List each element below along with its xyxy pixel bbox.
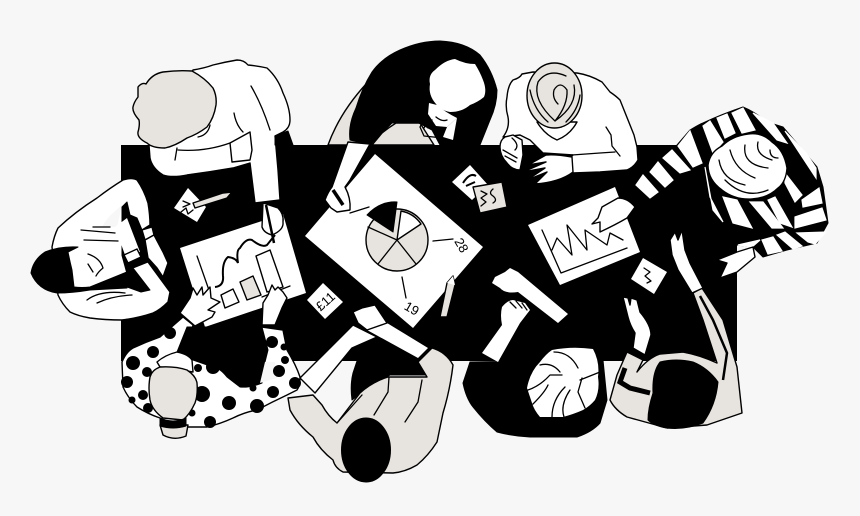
left arm <box>300 325 377 393</box>
grey bar <box>240 276 261 300</box>
person: top centre, black shirt <box>328 41 497 145</box>
left hand <box>180 287 220 326</box>
note: small right <box>631 258 667 294</box>
nose and eyes <box>88 254 103 276</box>
note <box>174 188 206 222</box>
background patch <box>260 362 277 383</box>
shirt <box>122 317 300 427</box>
note: lower left: £11 <box>313 289 338 314</box>
table <box>121 145 737 361</box>
hair <box>527 348 599 417</box>
black sweater base <box>677 107 828 257</box>
hair lines <box>528 352 600 417</box>
sleeve lines <box>81 227 132 303</box>
hand at chin <box>420 117 447 138</box>
face sliver <box>198 125 210 137</box>
face <box>67 247 126 287</box>
finger lines <box>510 301 527 310</box>
hand <box>353 305 387 330</box>
polka dots <box>121 314 301 428</box>
shoulder in black <box>275 131 293 145</box>
right hand <box>262 285 287 325</box>
white bar <box>221 289 239 308</box>
note: white scribble <box>452 165 488 200</box>
black hair <box>648 360 718 428</box>
pie base <box>366 209 428 271</box>
chair back and lap <box>328 83 434 145</box>
black hair <box>31 247 127 293</box>
hair curls <box>719 142 778 193</box>
pie dividers <box>368 227 416 264</box>
right chart sheet <box>528 187 640 285</box>
person: bottom right, grey jacket <box>610 230 742 428</box>
grey shirt <box>288 348 453 473</box>
sheet <box>305 154 483 328</box>
white sweater <box>503 72 638 173</box>
jacket stripes <box>700 296 727 380</box>
wavy trend line <box>215 235 275 287</box>
person: right, striped sweater <box>592 107 828 278</box>
black body <box>463 360 607 437</box>
cuff far arm <box>142 227 154 240</box>
collar bottom <box>160 425 188 438</box>
sweater crease <box>572 127 620 156</box>
black offset wedge <box>367 202 397 232</box>
label line 28 <box>433 239 453 241</box>
face <box>537 122 577 140</box>
hat <box>527 63 582 128</box>
note: lower left <box>307 283 343 319</box>
face <box>428 103 457 127</box>
tall bar <box>256 250 283 292</box>
pie chart sheet <box>305 154 483 328</box>
left raised hand <box>623 297 651 355</box>
grey hair <box>133 71 216 148</box>
person: top left, grey hair <box>133 60 293 203</box>
person: bottom, white curly hair <box>463 268 607 437</box>
label 28: 28 <box>451 235 472 255</box>
grey head <box>149 367 197 420</box>
far hand <box>145 235 168 277</box>
right arm <box>367 323 428 358</box>
base line <box>262 286 290 297</box>
black shirt <box>350 41 497 145</box>
right raised hand <box>670 230 703 293</box>
note with scribble and pencil <box>174 188 232 222</box>
black vest <box>351 360 427 400</box>
shirt folds <box>337 377 422 423</box>
label 19: 19 <box>402 298 422 319</box>
black head <box>342 418 390 482</box>
tablet and sleeve shadow <box>122 202 150 292</box>
light gap behind arm <box>102 205 122 227</box>
pencil <box>193 192 232 208</box>
zigzag line <box>552 225 623 255</box>
sheet <box>528 187 640 285</box>
left chart sheet <box>180 214 306 327</box>
near hand <box>115 218 140 255</box>
person: bottom centre, grey shirt <box>288 305 453 482</box>
pointer line to pen <box>350 207 369 213</box>
axis <box>197 256 210 293</box>
hand <box>230 132 252 162</box>
white hair <box>430 59 485 112</box>
label line 19 <box>402 277 406 298</box>
white shirt <box>149 60 290 203</box>
near cuff <box>124 249 141 263</box>
arm and hand with pen on pie sheet <box>325 142 370 212</box>
white slice <box>397 211 421 240</box>
axis <box>542 230 627 273</box>
person: left, black hair <box>31 178 170 320</box>
white curly hair <box>708 134 787 199</box>
white hair <box>157 352 193 372</box>
hand on table edge <box>717 247 755 278</box>
arm creases <box>175 86 270 160</box>
left hand <box>500 135 523 170</box>
person: bottom left, polka dot shirt <box>121 285 301 438</box>
person: top right, hat <box>500 63 638 184</box>
arm with hand <box>482 300 530 362</box>
white body <box>52 178 170 320</box>
scribble <box>181 201 193 214</box>
collar gap <box>443 118 457 140</box>
arm reaching up <box>492 268 568 323</box>
black collar <box>160 418 186 428</box>
hand on chart <box>592 198 635 232</box>
sheet <box>180 214 306 327</box>
sweater white stripes <box>636 108 826 254</box>
fist lines <box>503 138 517 162</box>
hat swirl <box>530 73 580 122</box>
note: grey scribble <box>473 182 507 213</box>
jacket <box>610 288 742 428</box>
hand holding pen over chart <box>262 203 283 243</box>
black interior <box>177 327 268 387</box>
pencil: centre <box>440 276 455 317</box>
right hand <box>523 155 573 184</box>
